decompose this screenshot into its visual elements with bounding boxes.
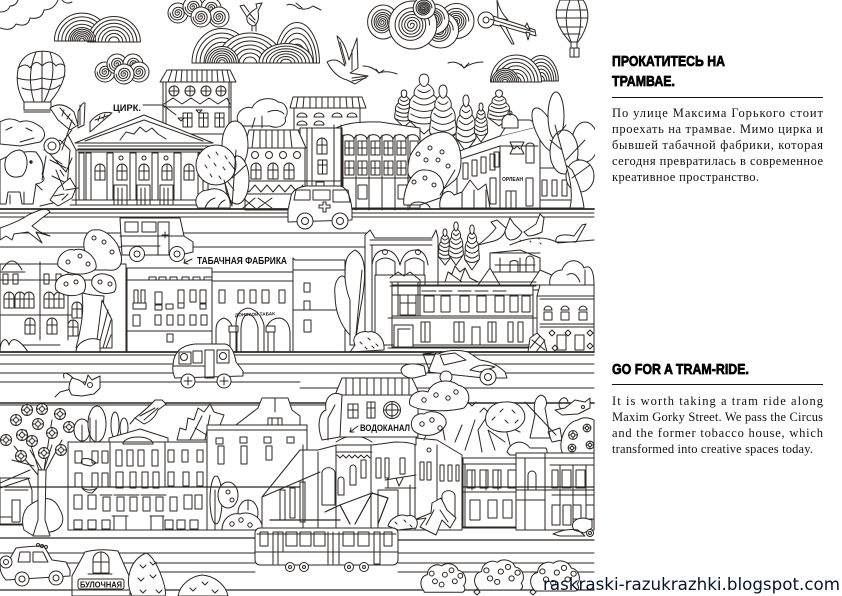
trees: behind left third-row building — [74, 406, 128, 442]
cloud: spirals top — [168, 0, 229, 27]
birds: ducks and swan — [478, 214, 594, 245]
icon: bicycle — [553, 518, 594, 536]
text block: Russian: По улице Максима Горького стоит — [612, 106, 824, 120]
text block: English: transformed into creative spaces today. — [612, 442, 813, 456]
icon: cat — [55, 373, 100, 397]
building: bakery: БУЛОЧНАЯ — [80, 580, 122, 590]
building: right house — [537, 261, 594, 352]
shrub: near tram right — [388, 515, 417, 530]
icon: monkey and big cat — [42, 120, 78, 206]
building: left street row two — [0, 261, 126, 352]
trees: right of circus — [196, 121, 249, 208]
trees: poplars over mansion — [438, 222, 479, 270]
tree: oval foliage left of arched facade — [335, 250, 365, 345]
icon: elephant — [0, 150, 44, 204]
vehicle: tram — [255, 493, 398, 572]
label: vodokanal: ВОДОКАНАЛ — [360, 423, 410, 433]
building: wing beside factory — [293, 258, 345, 352]
heading: Russian: ПРОКАТИТЕСЬ НА — [612, 53, 725, 70]
text block: Russian: бывшей табачной фабрики, которая — [612, 138, 823, 152]
tree: flowering centre — [404, 132, 461, 205]
road lines: second street — [0, 352, 594, 405]
building: vodokanal upper house — [335, 378, 420, 437]
building: bakery — [72, 550, 132, 596]
building: tobacco factory — [127, 268, 212, 352]
text block: English: It is worth taking a tram ride along — [612, 394, 824, 408]
building: waterworks castle — [262, 436, 462, 530]
road lines: third street — [0, 487, 594, 590]
cloud: top-left scalloped — [0, 0, 72, 29]
building: gable behind — [232, 398, 300, 435]
tree: flowering left of third row — [0, 404, 74, 536]
icon: butterfly — [414, 498, 456, 535]
building: mansion — [388, 272, 536, 348]
icon: airplane — [478, 0, 536, 44]
icon: dove — [327, 36, 368, 84]
building: third row second block — [207, 425, 307, 530]
building: circus with pediment — [70, 115, 213, 205]
building: third row right block — [463, 458, 525, 528]
cloud: arcs right — [490, 55, 558, 82]
building: arched facade — [365, 230, 438, 345]
label: circus: ЦИРК. — [113, 103, 141, 114]
vehicle: retro car — [401, 350, 507, 385]
tree: large right — [527, 92, 598, 208]
tree: flowering row two — [55, 230, 122, 352]
icon: running animal — [0, 209, 50, 243]
cloud: arcs top-left — [54, 13, 140, 42]
label: circus — [113, 103, 176, 115]
heading: Russian: ТРАМВАЕ. — [612, 73, 675, 90]
icon: janitor — [525, 395, 562, 442]
text block: English — [612, 394, 824, 456]
cloud: big spirals — [368, 0, 474, 49]
building: tobacco factory gate wing: ДОНСКОЙ ТАБАК — [235, 309, 275, 318]
building: arched block — [336, 122, 420, 210]
bushes: bottom right — [421, 560, 579, 595]
icon: cat with curl tail — [555, 398, 590, 415]
bushes: bottom left — [128, 553, 228, 596]
heading: English: GO FOR A TRAM-RIDE. — [612, 361, 749, 378]
vehicle: minibus — [173, 344, 243, 388]
vehicle: top bus — [120, 218, 193, 262]
building: upper house behind circus — [160, 70, 236, 134]
illustration: spiky sun shrub — [445, 266, 478, 282]
building: mansion back tower — [478, 250, 575, 290]
icon: gulls — [287, 3, 483, 74]
cloud: spirals left — [95, 54, 149, 84]
label: tobacco factory: ТАБАЧНАЯ ФАБРИКА — [197, 255, 287, 267]
illustration: foliage behind animals — [40, 130, 76, 206]
text block: English: and the former tobacco house, which — [612, 426, 824, 440]
tree: left of vodokanal — [319, 393, 342, 440]
vehicle: old car — [0, 544, 70, 586]
icon: pigeon — [130, 400, 166, 424]
icon: balloon right — [556, 0, 588, 57]
white edge covering overflow right of drawing — [595, 0, 842, 596]
heading: Russian — [612, 53, 725, 90]
road lines: first street — [0, 209, 594, 270]
cloud: big arcs centre — [192, 22, 320, 63]
trees: poplars back row — [395, 74, 510, 152]
text block: Russian: сегодня превратилась в современное — [612, 154, 823, 168]
tree: spiky behind — [177, 404, 232, 440]
text block: Russian — [612, 106, 824, 184]
building: tobacco factory gate wing — [212, 272, 293, 352]
tree: behind striped building — [237, 99, 287, 128]
palm: behind circus — [50, 103, 112, 132]
building: third row main — [68, 429, 208, 530]
building: striped roof — [243, 130, 306, 210]
building: tower block left of arched block — [300, 125, 342, 210]
house: upper mid roof — [290, 97, 366, 130]
tree: flower tree right edge — [560, 418, 594, 456]
trees: third row mid — [210, 476, 278, 530]
divider: Russian — [612, 97, 823, 98]
shrubs: by corner building — [410, 180, 490, 208]
icon: balloon left — [17, 51, 65, 112]
shrubs: mansion corners — [350, 332, 547, 352]
text block: Russian: проехать на трамвае. Мимо цирка и — [612, 122, 823, 136]
trees: flowering right of vodokanal — [409, 381, 547, 455]
illustration: left bushes — [0, 119, 45, 146]
icon: bird on cloud — [240, 3, 262, 31]
text block: Russian: креативное пространство. — [612, 170, 759, 184]
building: third row far right — [516, 453, 594, 530]
building: corner with dome: ОРЛЕАН — [502, 177, 523, 183]
illustration: city street panorama — [0, 0, 598, 596]
text block: English: Maxim Gorky Street. We pass the Circus — [612, 410, 823, 424]
divider: English — [612, 384, 823, 385]
building: corner with dome — [457, 111, 575, 208]
vehicle: ambulance — [288, 182, 352, 229]
watermark: raskraski-razukrazhki.blogspot.com — [543, 575, 840, 595]
